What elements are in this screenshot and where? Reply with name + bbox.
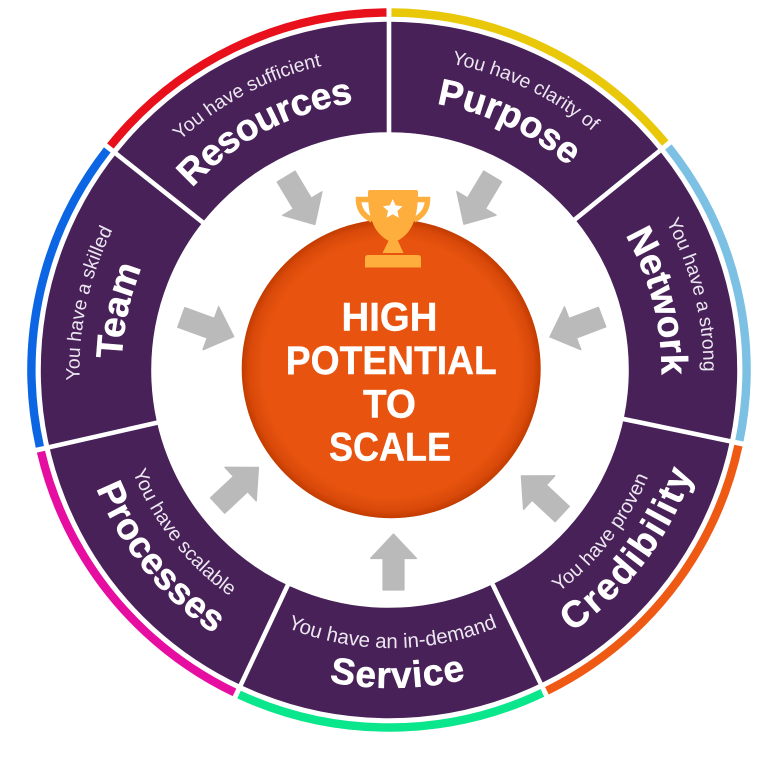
centre title: HIGH bbox=[342, 296, 438, 340]
segment: Network: You have a strong bbox=[668, 216, 714, 370]
segment: Network bbox=[626, 216, 714, 376]
arrows pointing to centre bbox=[174, 165, 610, 590]
segment: Credibility: You have proven bbox=[550, 474, 648, 589]
centre title: SCALE bbox=[329, 426, 451, 470]
arrow: from Resources bbox=[267, 165, 334, 236]
segment: Purpose: Purpose bbox=[438, 78, 577, 163]
segment: Purpose: You have clarity of bbox=[454, 50, 602, 130]
centre title: TO bbox=[363, 382, 416, 426]
segment: Credibility: Credibility bbox=[562, 466, 695, 628]
arrow: from Service bbox=[371, 534, 416, 590]
segment: Service bbox=[292, 614, 496, 688]
segment: Purpose bbox=[438, 50, 602, 163]
segment: Team: You have a skilled bbox=[66, 224, 112, 380]
segment: Processes: Processes bbox=[96, 480, 222, 631]
arrow: from Purpose bbox=[444, 165, 512, 236]
arrow: from Processes bbox=[202, 451, 274, 522]
segment: Network: Network bbox=[626, 225, 688, 376]
segment: Resources: You have sufficient bbox=[172, 54, 322, 137]
segment: Service: Service bbox=[330, 658, 464, 688]
arrow: from Network bbox=[542, 296, 610, 358]
segment: Team: Team bbox=[96, 264, 141, 358]
segment: Processes: You have scalable bbox=[135, 467, 234, 594]
icon: trophy bbox=[358, 190, 428, 268]
arrow: from Credibility bbox=[506, 459, 578, 531]
segment: Service: You have an in-demand bbox=[292, 614, 496, 648]
centre title: POTENTIAL bbox=[286, 339, 497, 383]
segment: Team bbox=[66, 224, 141, 380]
segment: Resources: Resources bbox=[175, 84, 352, 186]
purple segment ring bbox=[46, 18, 734, 688]
centre title bbox=[286, 296, 497, 470]
central orange circle bbox=[242, 219, 541, 518]
arrow: from Team bbox=[174, 296, 241, 358]
